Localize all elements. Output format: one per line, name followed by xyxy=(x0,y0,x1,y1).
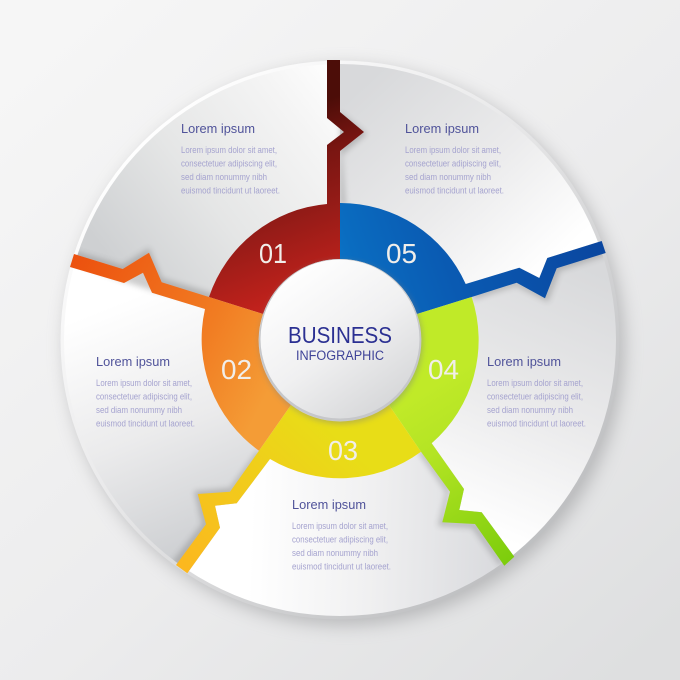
center title: INFOGRAPHIC xyxy=(296,348,384,363)
sector 01 background xyxy=(78,78,266,297)
number 05: 05 xyxy=(386,238,417,269)
text block 03: Lorem ipsum xyxy=(292,497,366,512)
segment 05 blue with strip xyxy=(340,203,606,314)
segment 04 green with strip xyxy=(389,297,514,566)
text block 02: sed diam nonummy nibh xyxy=(96,405,182,415)
text block 05: consectetuer adipiscing elit, xyxy=(405,158,501,168)
text block 03: euismod tincidunt ut laoreet. xyxy=(292,562,391,572)
text block 03: sed diam nonummy nibh xyxy=(292,548,378,558)
text block 04: sed diam nonummy nibh xyxy=(487,405,573,415)
text block 01: euismod tincidunt ut laoreet. xyxy=(181,186,280,196)
text block 01: consectetuer adipiscing elit, xyxy=(181,158,277,168)
number 02: 02 xyxy=(221,354,252,385)
text block 04 xyxy=(487,354,586,428)
disc sectors xyxy=(67,64,616,616)
text block 05: Lorem ipsum xyxy=(405,121,479,136)
center circle shadow xyxy=(259,260,423,424)
text block 03 xyxy=(292,497,391,572)
text block 01: Lorem ipsum xyxy=(181,121,255,136)
text block 02: euismod tincidunt ut laoreet. xyxy=(96,418,195,428)
disc drop shadow xyxy=(66,67,624,625)
sector 02 background xyxy=(67,280,205,570)
number 04: 04 xyxy=(428,354,459,385)
text block 05: sed diam nonummy nibh xyxy=(405,172,491,182)
text block 02: consectetuer adipiscing elit, xyxy=(96,392,192,402)
segment 01 red with strip xyxy=(209,60,364,314)
text block 01 xyxy=(181,121,280,196)
text block 03: consectetuer adipiscing elit, xyxy=(292,534,388,544)
text block 03: Lorem ipsum dolor sit amet, xyxy=(292,521,388,531)
strip shadows xyxy=(72,112,605,568)
text block 05: euismod tincidunt ut laoreet. xyxy=(405,186,504,196)
center title: BUSINESS xyxy=(288,322,392,348)
sector 05 background xyxy=(340,64,598,306)
segment 03 yellow with strip xyxy=(176,405,421,573)
text block 05: Lorem ipsum dolor sit amet, xyxy=(405,145,501,155)
text block 02 xyxy=(96,354,195,428)
text block 02: Lorem ipsum xyxy=(96,354,170,369)
segment 02 orange with strip xyxy=(70,253,291,451)
text block 01: Lorem ipsum dolor sit amet, xyxy=(181,145,277,155)
text block 04: Lorem ipsum xyxy=(487,354,561,369)
number 03: 03 xyxy=(328,435,358,466)
center circle xyxy=(259,259,421,421)
center title xyxy=(288,322,392,363)
text block 04: consectetuer adipiscing elit, xyxy=(487,392,583,402)
text block 01: sed diam nonummy nibh xyxy=(181,172,267,182)
outer disc rim xyxy=(60,60,620,620)
number 01: 01 xyxy=(259,238,287,269)
text block 05 xyxy=(405,121,504,196)
text block 04: euismod tincidunt ut laoreet. xyxy=(487,418,586,428)
sector 04 background xyxy=(394,275,616,555)
sector 03 background xyxy=(189,400,502,616)
text block 02: Lorem ipsum dolor sit amet, xyxy=(96,378,192,388)
text block 04: Lorem ipsum dolor sit amet, xyxy=(487,378,583,388)
